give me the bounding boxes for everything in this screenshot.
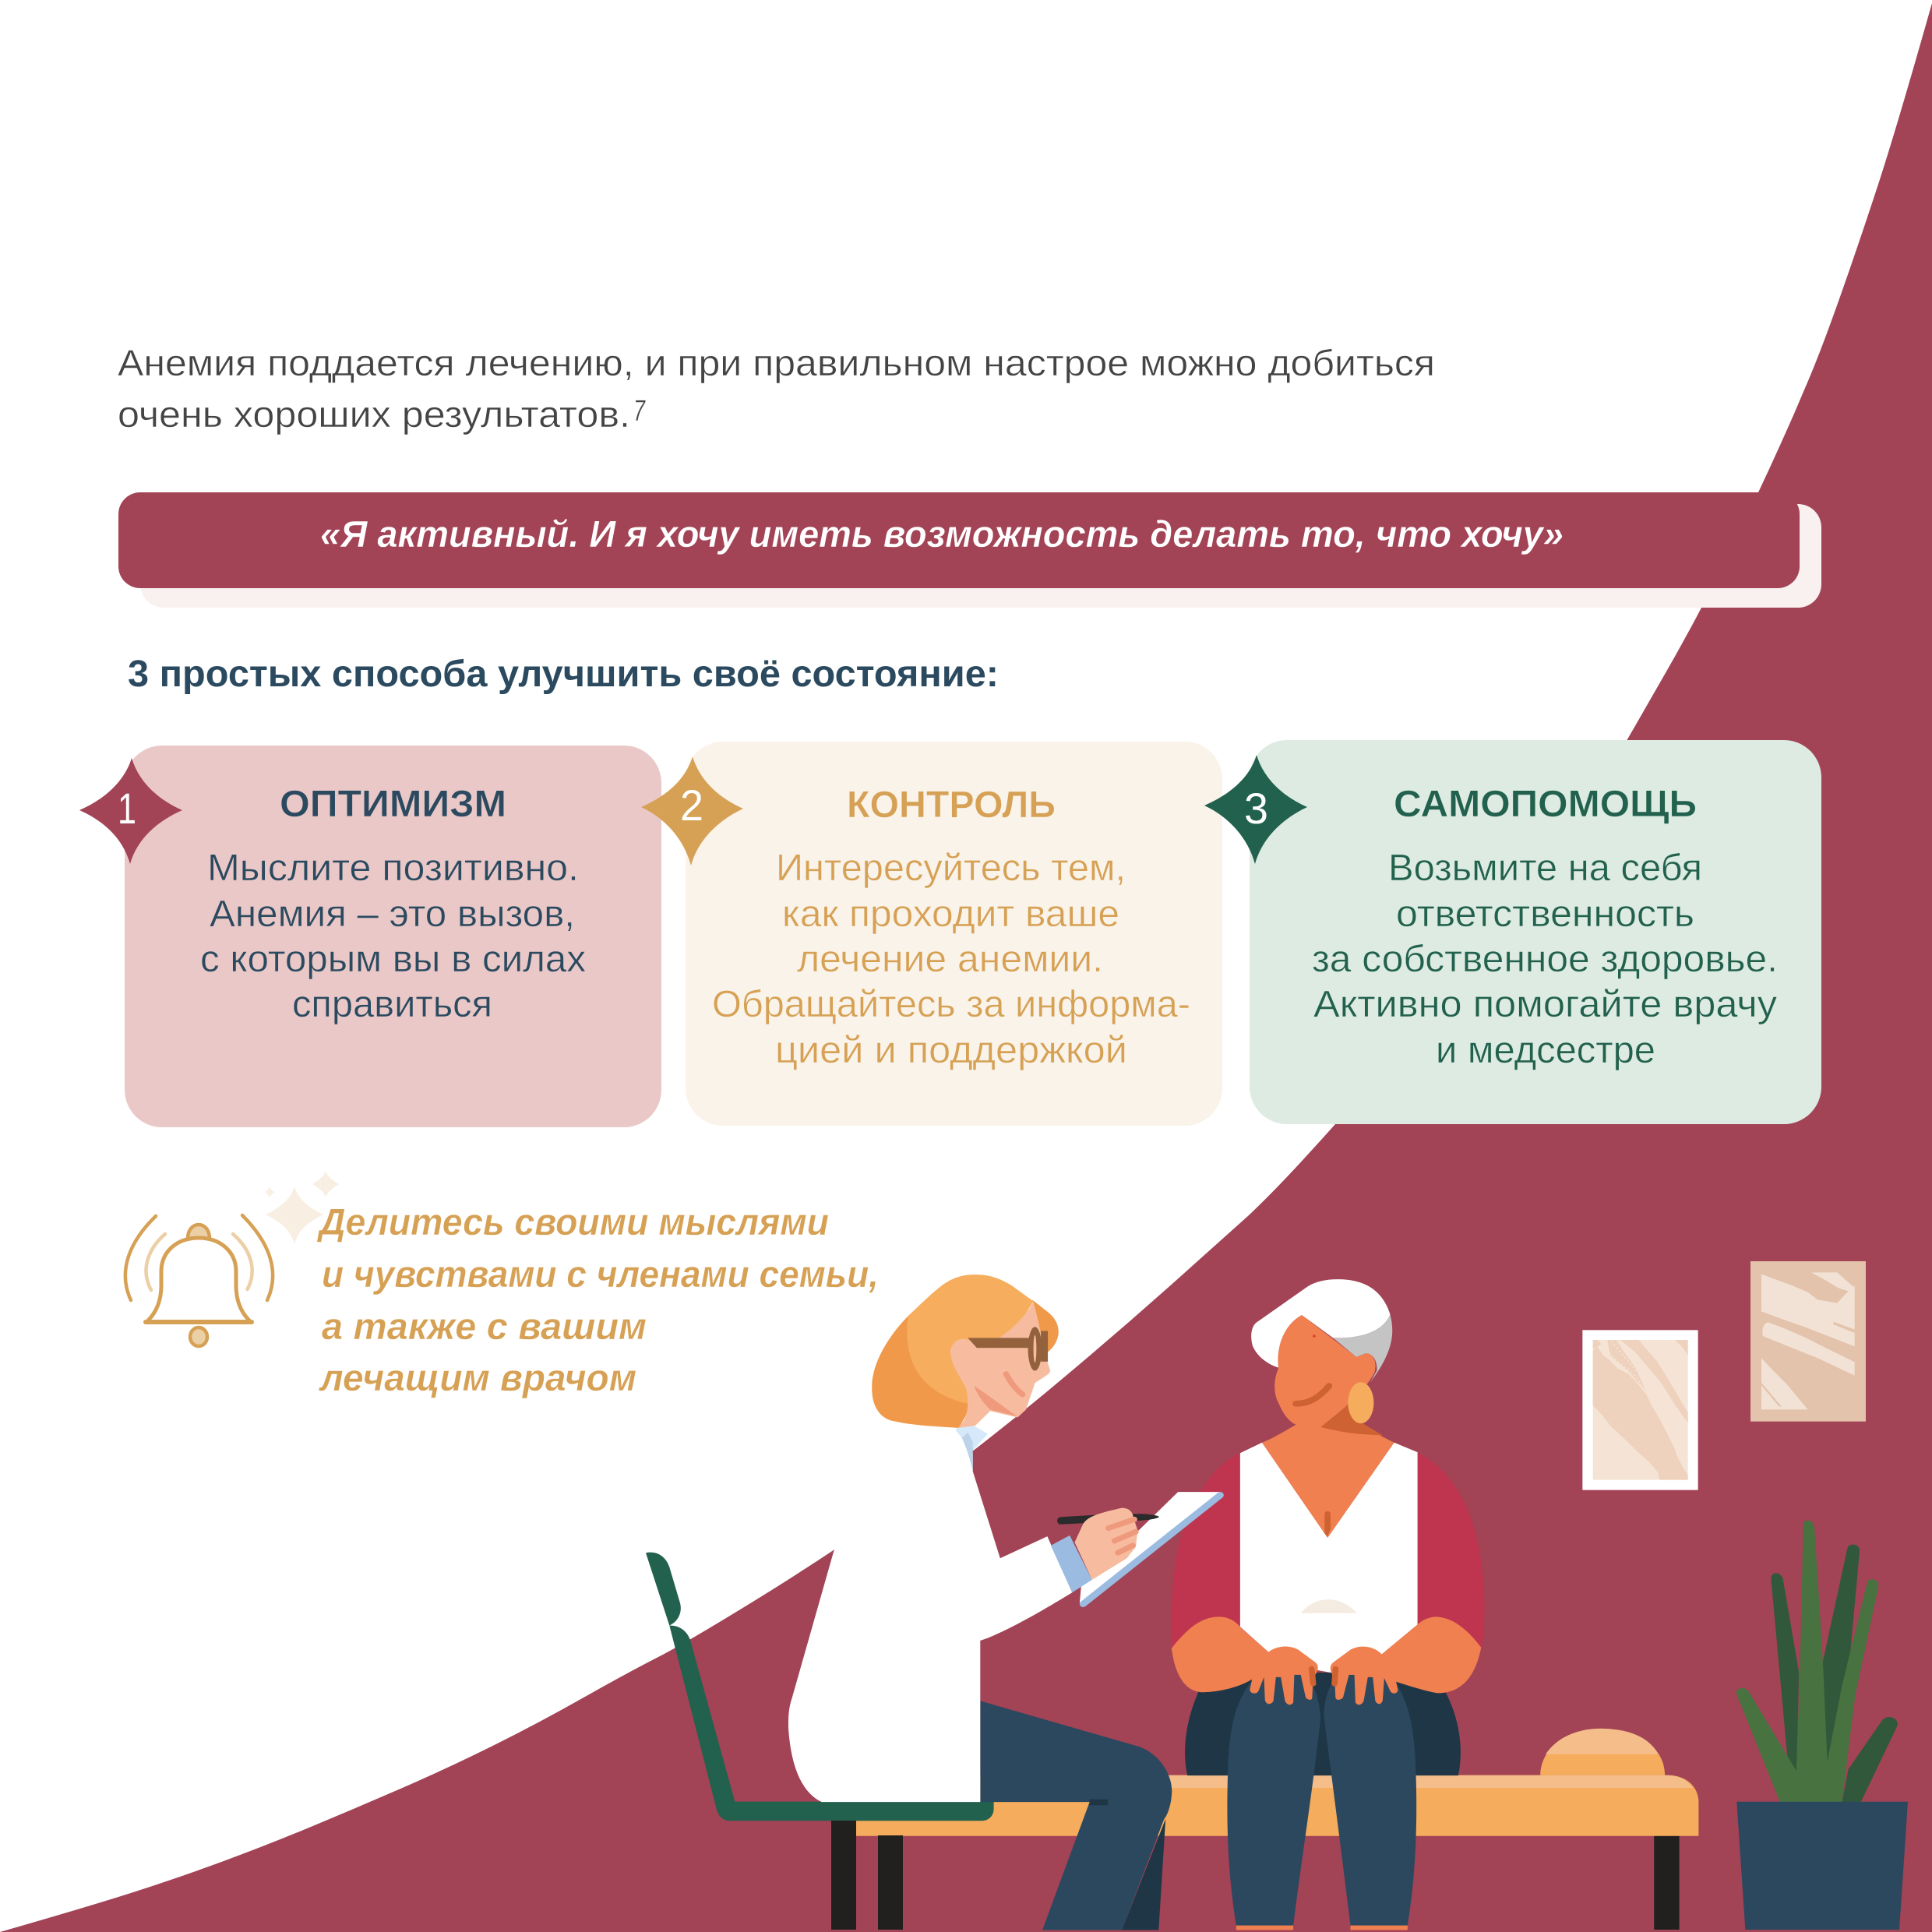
card body: лечение анемии. <box>797 939 1103 980</box>
doctor hair <box>872 1274 1059 1428</box>
quote banner <box>118 492 1821 608</box>
patient lower body <box>1185 1673 1461 1775</box>
plant <box>1736 1520 1908 1930</box>
doctor cuff <box>1051 1535 1092 1592</box>
picture: white frame <box>1582 1330 1698 1490</box>
card body: с которым вы в силах <box>200 939 586 980</box>
patient chest and neck <box>1262 1423 1394 1613</box>
patient sleeves <box>1171 1452 1485 1650</box>
heading: 3 простых способа улучшить своё состояние: <box>128 654 999 695</box>
card body <box>712 848 1190 1071</box>
intro text: Анемия поддается лечению, и при правильном настрое можно добиться <box>118 342 1435 383</box>
card body: цией и поддержкой <box>775 1030 1127 1071</box>
card body: и медсестре <box>1436 1030 1655 1071</box>
cushion <box>1540 1729 1665 1775</box>
pen <box>1057 1514 1159 1525</box>
card body: справиться <box>292 984 492 1025</box>
callout text: лечащим врачом <box>319 1358 636 1399</box>
card body: за собственное здоровье. <box>1312 939 1778 980</box>
chair <box>646 1553 994 1821</box>
panel: optimism <box>79 746 661 1127</box>
intro text: 7 <box>633 395 646 428</box>
card body: Обращайтесь за информа- <box>712 984 1190 1025</box>
patient <box>1171 1279 1485 1930</box>
doctor collar <box>955 1419 988 1472</box>
chair legs <box>831 1821 903 1930</box>
doctor trousers <box>980 1701 1172 1930</box>
card body <box>1312 848 1778 1071</box>
icon: sparkles <box>265 1171 339 1244</box>
card title: ОПТИМИЗМ <box>280 784 506 825</box>
doctor <box>788 1274 1220 1930</box>
doctor hand <box>1074 1508 1137 1580</box>
card title: КОНТРОЛЬ <box>847 784 1056 826</box>
icon: star number 3 <box>1204 755 1307 864</box>
intro text: очень хороших результатов. <box>118 393 630 435</box>
panel: control <box>641 742 1222 1126</box>
card body: Мыслите позитивно. <box>207 848 579 889</box>
icon: star number 1 <box>79 758 182 864</box>
picture: beige frame <box>1750 1261 1866 1422</box>
card body: ответственность <box>1396 894 1694 935</box>
patient right arm <box>1331 1616 1481 1705</box>
card body: Интересуйтесь тем, <box>776 848 1126 889</box>
patient head <box>1251 1279 1392 1435</box>
patient left arm <box>1172 1616 1318 1705</box>
patient thumbs <box>1312 1669 1335 1683</box>
patient vest <box>1240 1443 1418 1673</box>
callout text: Делитесь своими мыслями <box>316 1202 829 1243</box>
quote banner: «Я активный. И я хочу иметь возможность делать то, что хочу» <box>320 514 1564 555</box>
bench <box>856 1729 1698 1930</box>
patient legs <box>1227 1668 1416 1930</box>
intro text <box>118 342 1435 435</box>
callout text: и чувствами с членами семьи, <box>322 1254 879 1296</box>
callout text <box>316 1202 879 1399</box>
card body: Активно помогайте врачу <box>1313 984 1777 1025</box>
doctor glasses <box>968 1327 1048 1371</box>
icon: star number 2 <box>641 756 743 866</box>
icon: star number 3: 3 <box>1244 784 1268 833</box>
card body: как проходит ваше <box>782 894 1119 935</box>
panel: self-help <box>1204 740 1821 1124</box>
card body: Возьмите на себя <box>1388 848 1702 889</box>
icon: star number 2: 2 <box>680 781 703 830</box>
bench seat <box>856 1775 1698 1836</box>
callout text: а также с вашим <box>322 1306 647 1348</box>
doctor face <box>950 1303 1050 1428</box>
doctor coat <box>788 1428 1072 1802</box>
bench leg <box>1654 1835 1680 1930</box>
icon: bell <box>125 1215 273 1346</box>
card body <box>200 848 586 1025</box>
plant pot <box>1736 1802 1908 1930</box>
clipboard <box>1080 1492 1220 1604</box>
card title: САМОПОМОЩЬ <box>1394 784 1697 825</box>
icon: star number 1: 1 <box>118 784 136 833</box>
card body: Анемия – это вызов, <box>210 894 575 935</box>
